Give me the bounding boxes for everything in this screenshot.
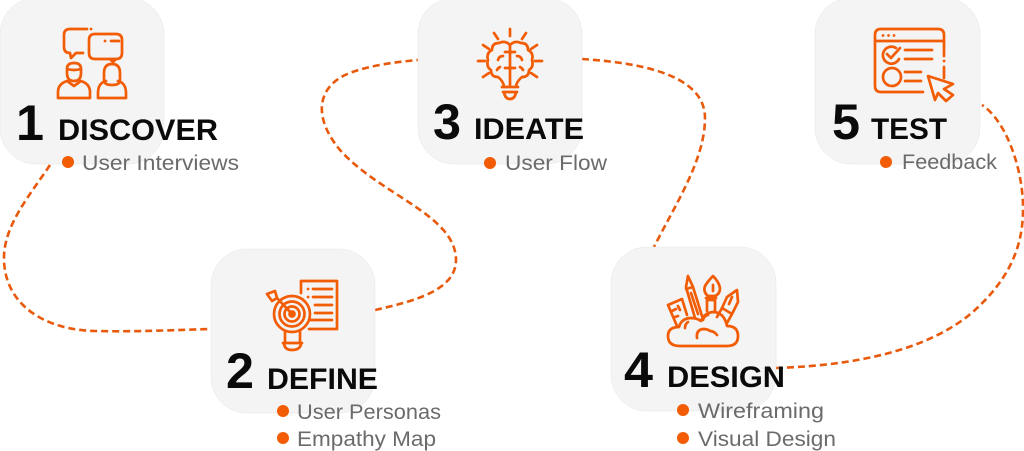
connector: define to ideate bbox=[322, 60, 456, 310]
icon: two people talking bbox=[58, 29, 126, 98]
heading: define: DEFINE bbox=[267, 363, 378, 396]
bullet: feedback: Feedback bbox=[902, 151, 998, 174]
card: ideate bbox=[418, 0, 582, 164]
card: test bbox=[815, 0, 980, 164]
panel: design bbox=[611, 247, 836, 451]
icon: art tools in cloud bbox=[668, 276, 738, 346]
panel: ideate bbox=[418, 0, 608, 175]
icon: browser checklist with cursor bbox=[875, 29, 953, 101]
step number 2: 2 bbox=[226, 343, 254, 399]
panel: test bbox=[815, 0, 998, 174]
connector: design to test bbox=[776, 105, 1023, 368]
panel: discover bbox=[0, 0, 239, 175]
icon: target bulb and document bbox=[267, 281, 337, 350]
heading: discover: DISCOVER bbox=[58, 114, 218, 147]
heading: ideate: IDEATE bbox=[474, 113, 584, 146]
heading: test: TEST bbox=[871, 113, 947, 146]
heading: design: DESIGN bbox=[667, 361, 785, 394]
step number 5: 5 bbox=[832, 94, 860, 150]
bullet: user personas: User Personas bbox=[297, 401, 441, 424]
bullet: visual design: Visual Design bbox=[698, 428, 836, 451]
step number 4: 4 bbox=[624, 342, 653, 398]
icon: brain bulb bbox=[478, 29, 542, 99]
bullet: user flow: User Flow bbox=[505, 152, 608, 175]
bullet: empathy map: Empathy Map bbox=[297, 428, 436, 451]
bullet: user interviews: User Interviews bbox=[82, 152, 239, 175]
bullet: wireframing: Wireframing bbox=[698, 400, 824, 423]
card: design bbox=[611, 247, 776, 411]
connector: ideate to design bbox=[582, 59, 705, 247]
step number 1: 1 bbox=[16, 95, 44, 151]
card: discover bbox=[0, 0, 164, 164]
card: define bbox=[211, 249, 375, 413]
connector: discover to define bbox=[4, 165, 211, 331]
step number 3: 3 bbox=[433, 94, 461, 150]
panel: define bbox=[211, 249, 441, 451]
